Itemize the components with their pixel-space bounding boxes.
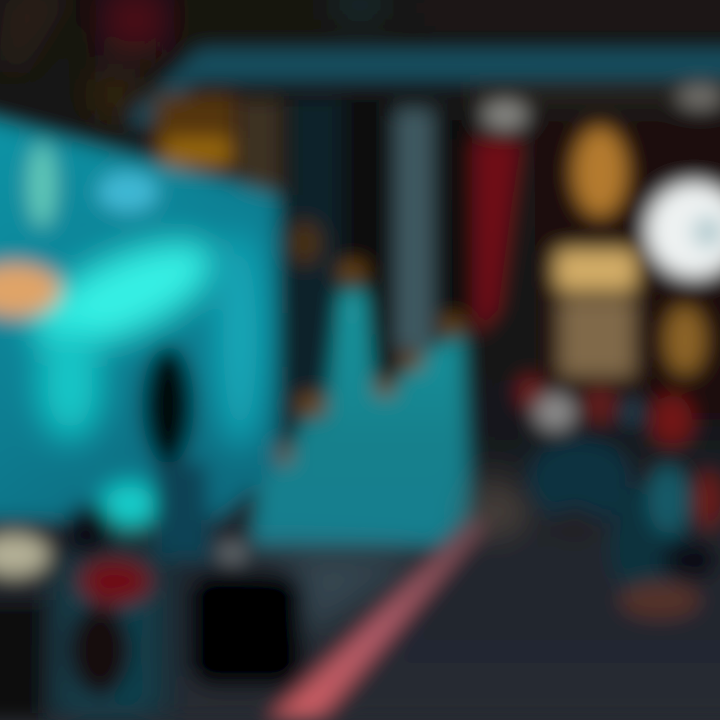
- audience right: [518, 376, 720, 618]
- bar chart silhouette: [252, 290, 470, 545]
- screen glow: [17, 143, 266, 529]
- teal ceiling band: [130, 50, 720, 130]
- chart peak highlights: [267, 221, 464, 465]
- orange blob on screen: [0, 264, 60, 316]
- floor patches: [225, 470, 535, 640]
- presenter silhouette: [142, 345, 212, 560]
- back wall panels: [155, 95, 720, 430]
- warm lights on right: [483, 86, 720, 376]
- audience left foreground: [0, 504, 302, 720]
- projection screen: [0, 112, 278, 520]
- ceiling details: [0, 0, 720, 120]
- red banner: [474, 140, 520, 335]
- white clock circle: [647, 183, 720, 277]
- pink floor line: [270, 518, 484, 720]
